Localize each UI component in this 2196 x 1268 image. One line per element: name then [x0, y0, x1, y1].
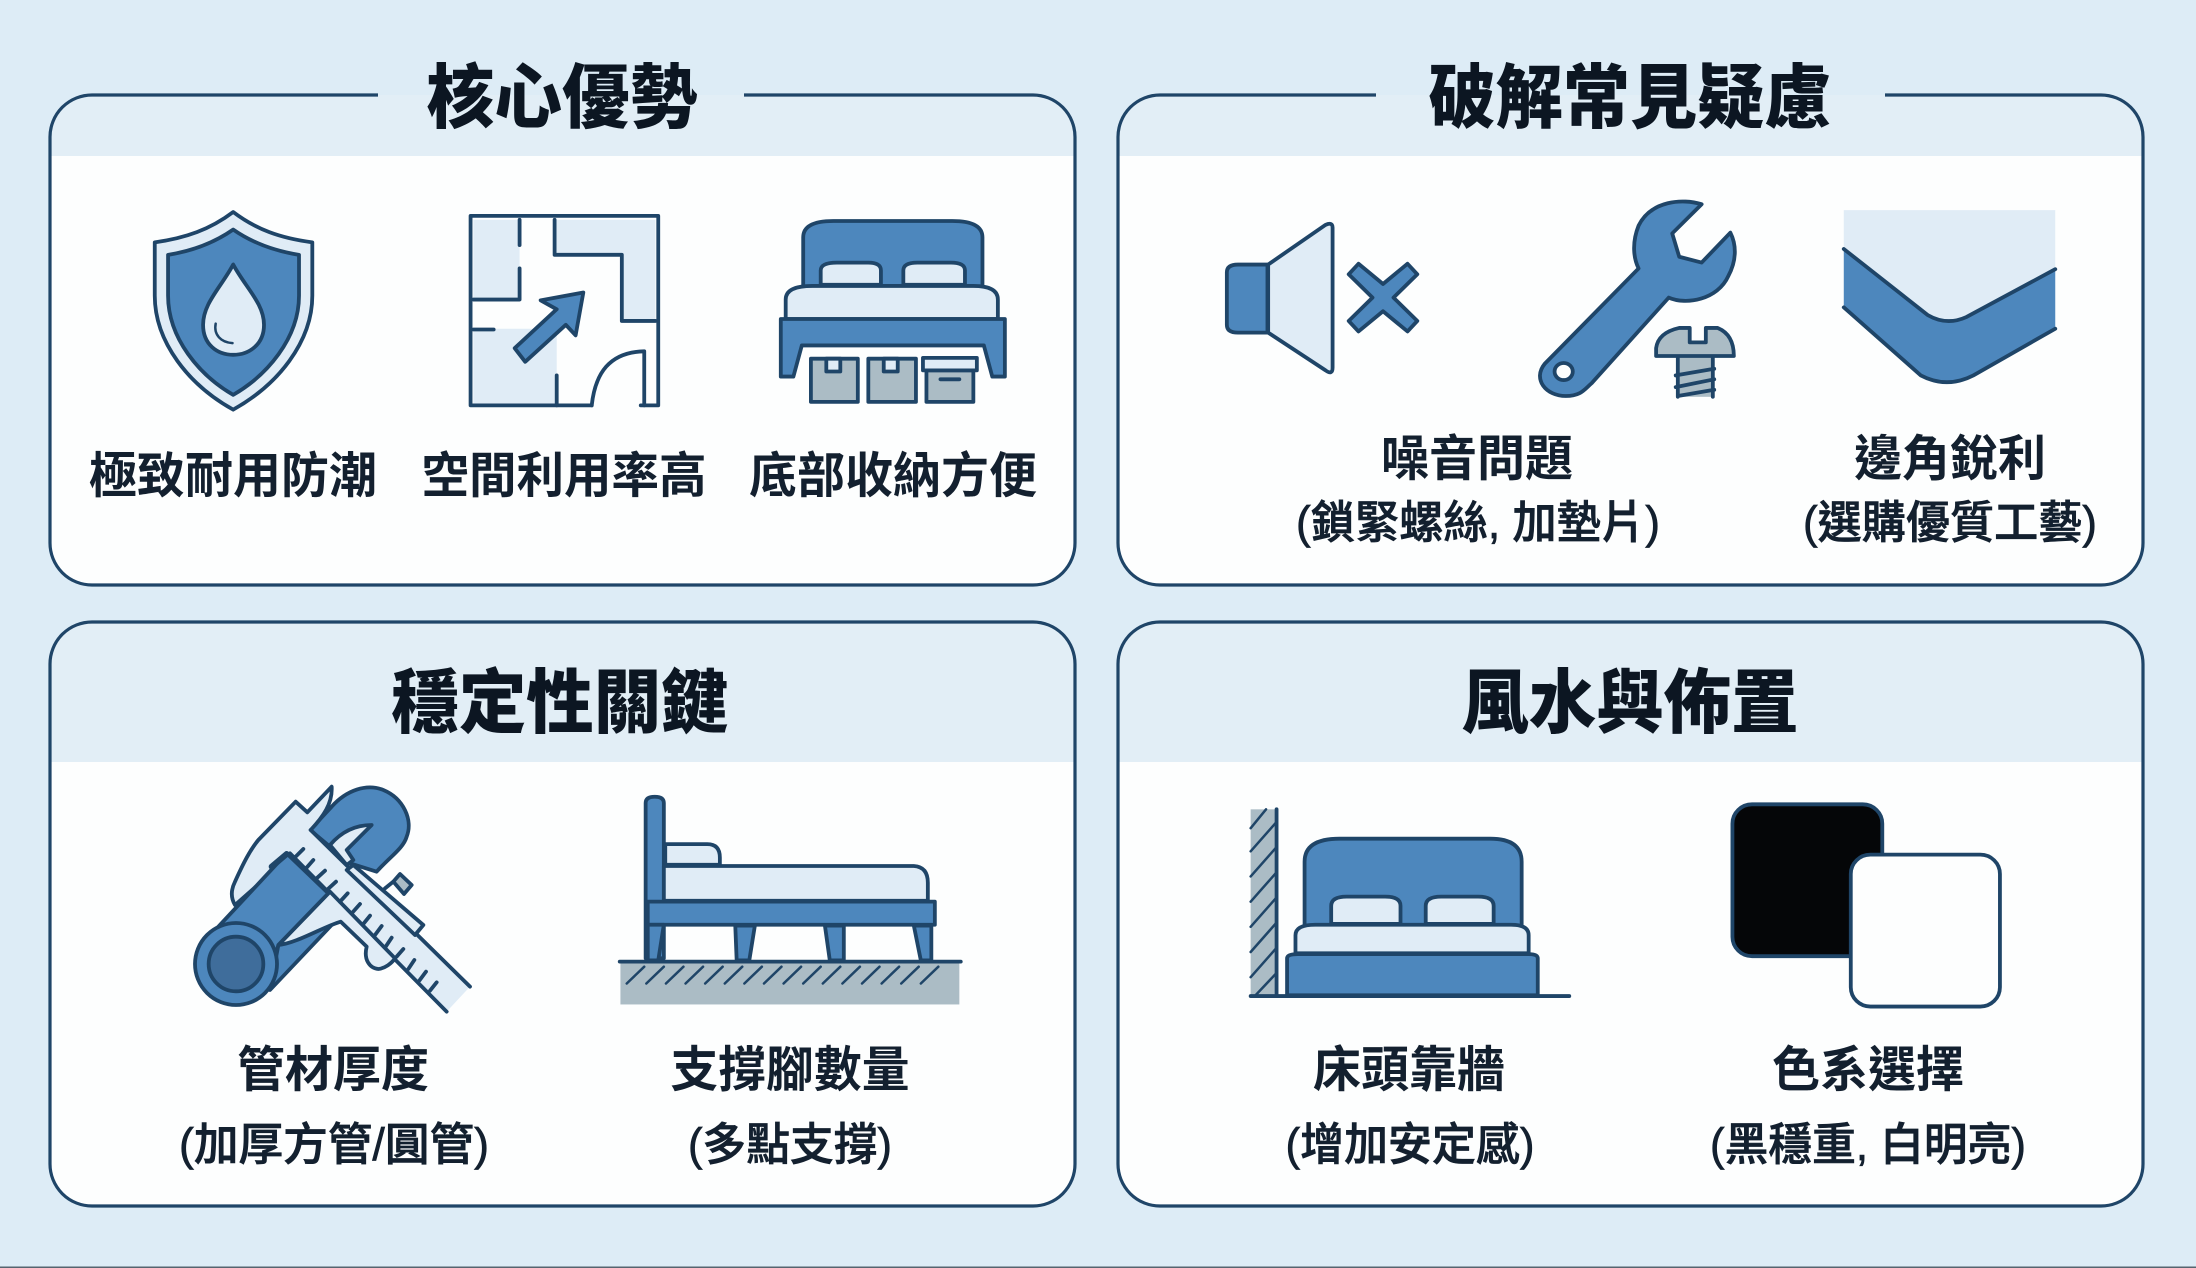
- icon: floor plan with arrow: [471, 216, 658, 405]
- label: colour choice: 色系選擇: [1772, 1044, 1964, 1098]
- label: support detail: (多點支撐): [688, 1119, 892, 1170]
- icon: shield with water drop: [155, 212, 312, 410]
- label: noise issue: 噪音問題: [1381, 432, 1573, 486]
- icon: black and white swatches: [1732, 804, 2000, 1007]
- heading: common concerns: 破解常見疑慮: [1428, 59, 1832, 137]
- heading: feng shui and layout: 風水與佈置: [1462, 664, 1798, 742]
- icon: bed with storage boxes: [781, 221, 1005, 402]
- label: under-bed storage: 底部收納方便: [749, 450, 1037, 504]
- heading: core advantages: 核心優勢: [426, 59, 698, 137]
- panel: feng shui and layout: [1118, 622, 2143, 1206]
- icon: rounded corner guard: [1844, 210, 2055, 382]
- panel: stability keys: [50, 622, 1075, 1206]
- icon: wrench and screw: [1540, 202, 1735, 397]
- icon: muted speaker: [1227, 224, 1417, 372]
- panel: core advantages: [50, 59, 1075, 585]
- label: tube thickness: 管材厚度: [237, 1044, 429, 1098]
- label: noise fix: (鎖緊螺絲, 加墊片): [1296, 497, 1660, 548]
- label: tube thickness detail: (加厚方管/圓管): [179, 1119, 489, 1170]
- heading: stability keys: 穩定性關鍵: [392, 664, 728, 742]
- label: headboard detail: (增加安定感): [1286, 1119, 1534, 1170]
- label: support leg count: 支撐腳數量: [670, 1044, 910, 1098]
- icon: bed against wall: [1251, 809, 1569, 996]
- label: edge fix: (選購優質工藝): [1803, 497, 2097, 548]
- icon: caliper measuring a tube: [195, 787, 470, 1012]
- label: space efficiency: 空間利用率高: [422, 450, 706, 504]
- panel: common concerns: [1118, 59, 2143, 585]
- label: colour detail: (黑穩重, 白明亮): [1710, 1119, 2026, 1170]
- label: headboard against wall: 床頭靠牆: [1313, 1044, 1505, 1098]
- icon: side view of bed with legs: [620, 797, 961, 1004]
- label: sharp edges: 邊角銳利: [1854, 432, 2046, 486]
- label: durability: 極致耐用防潮: [89, 450, 377, 504]
